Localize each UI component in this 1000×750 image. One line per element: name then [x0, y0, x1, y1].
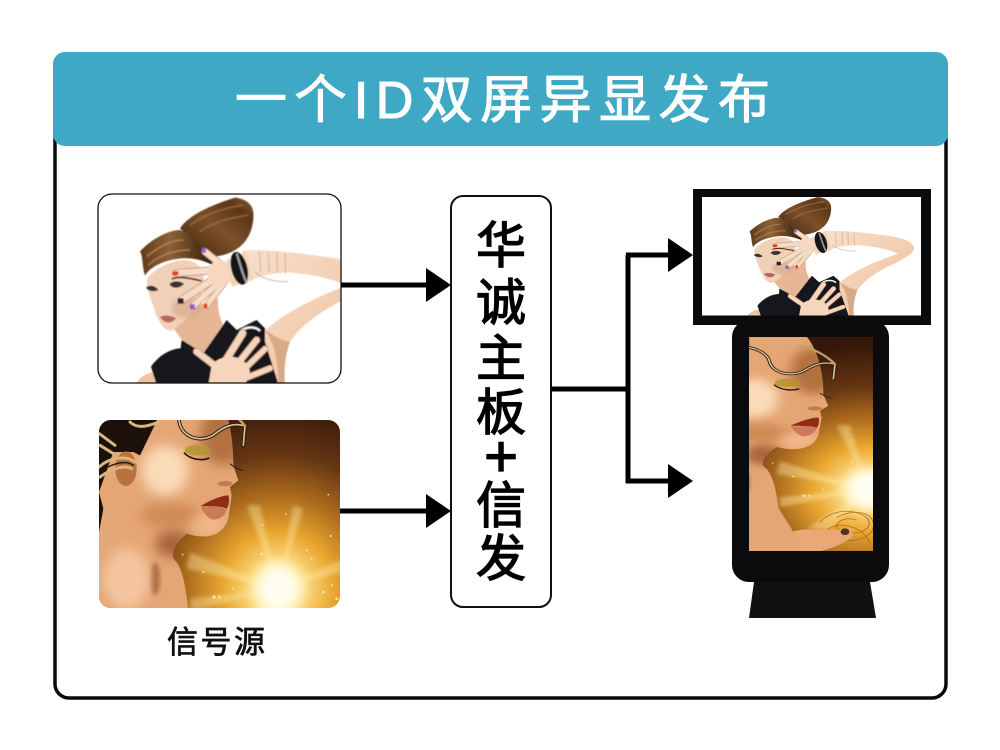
mainboard label: 华	[476, 218, 526, 274]
title banner	[53, 52, 948, 146]
outer frame	[55, 60, 946, 698]
lower portrait cabinet	[732, 320, 889, 582]
mainboard label: 主	[476, 331, 526, 387]
lower screen	[749, 337, 873, 551]
mainboard box	[451, 196, 551, 607]
title: 一个ID双屏异显发布	[235, 72, 770, 130]
branching arrows to dual screens	[551, 238, 693, 498]
mainboard label: +	[484, 424, 518, 489]
mainboard label: 诚	[476, 275, 526, 331]
upper landscape frame	[693, 189, 931, 325]
mainboard label: 板	[476, 385, 526, 441]
mainboard label: 发	[476, 531, 526, 587]
upper screen	[702, 197, 921, 318]
dual-screen device	[693, 189, 931, 618]
device stand	[749, 582, 876, 618]
signal source photo 2: golden portrait	[99, 420, 340, 608]
mainboard label	[476, 218, 526, 587]
arrow: photo 2 to mainboard	[340, 494, 451, 528]
signal source photo 1: woman with updo	[98, 194, 369, 385]
arrow: photo 1 to mainboard	[341, 268, 451, 302]
signal source caption: 信号源	[167, 625, 265, 660]
mainboard label: 信	[476, 478, 526, 534]
